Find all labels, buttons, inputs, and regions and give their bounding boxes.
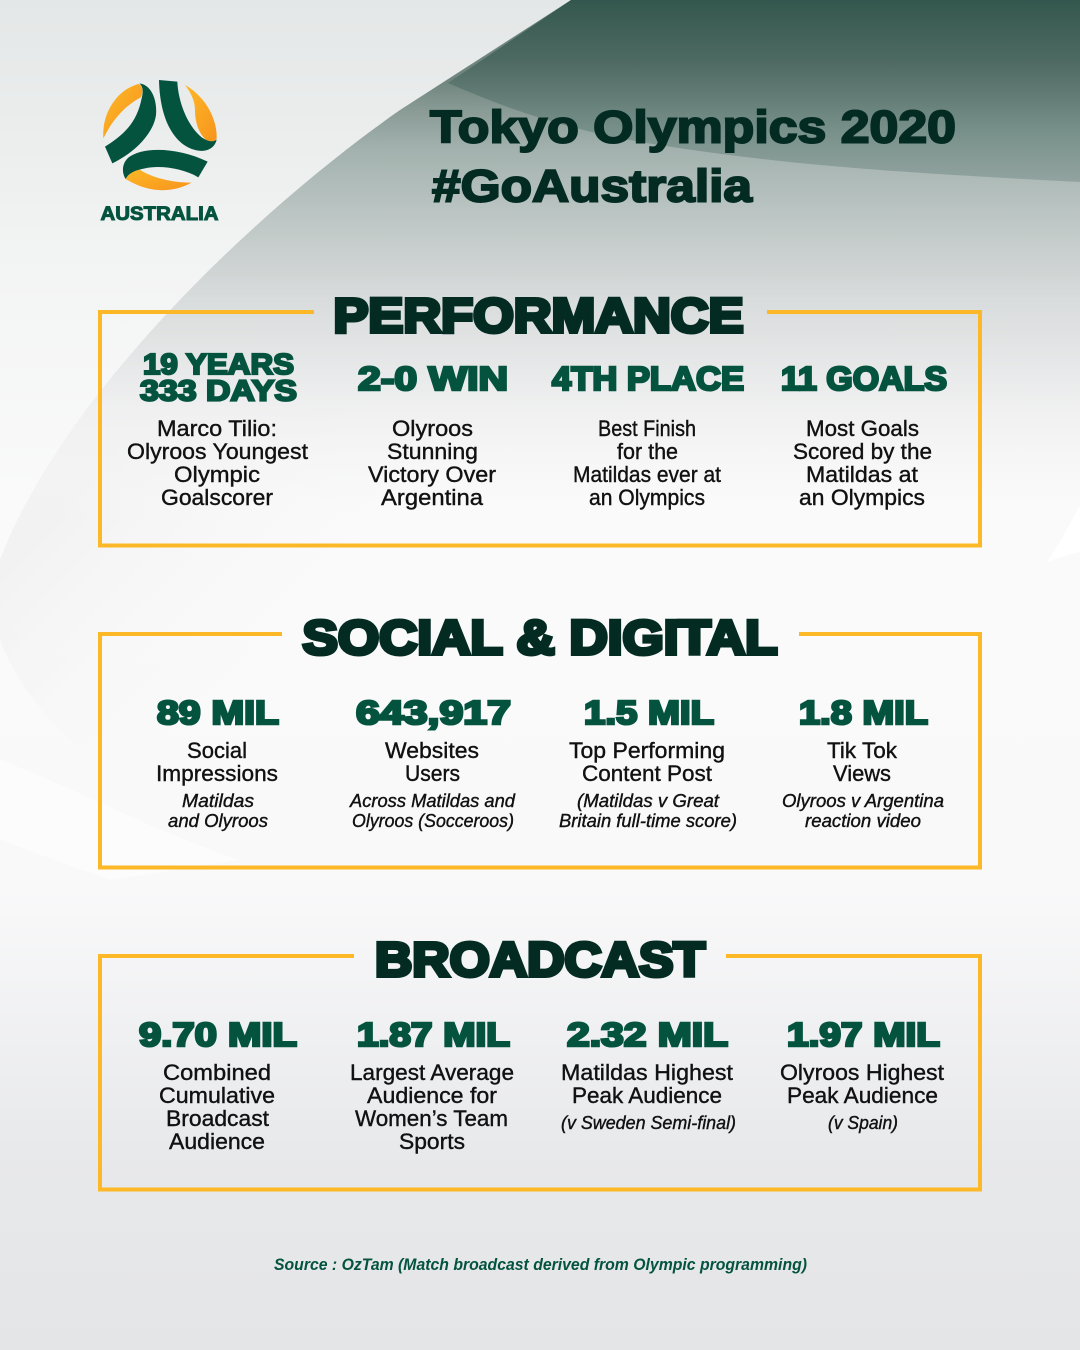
stat: 1.5 mil: 1.5 MIL xyxy=(584,695,714,732)
stat: 9.70 mil: Cumulative xyxy=(159,1083,275,1108)
panel frame: broadcast xyxy=(100,956,980,1190)
stat: 4th place: Best Finish xyxy=(598,416,696,441)
stat: 1.8 mil: 1.8 MIL xyxy=(799,695,928,732)
title: #GoAustralia xyxy=(432,161,753,212)
stat: 643,917: Websites xyxy=(385,738,479,763)
stat: 11 goals: an Olympics xyxy=(799,485,925,510)
stat: 1.5 mil: Top Performing xyxy=(569,738,725,763)
stat: 19 years 333 days: Goalscorer xyxy=(161,485,273,510)
stat: 2.32 mil: (v Sweden Semi-final) xyxy=(561,1113,736,1133)
stat: 1.87 mil: Sports xyxy=(399,1129,465,1154)
stat: 19 years 333 days: Marco Tilio: xyxy=(157,416,277,441)
stat: 19 years 333 days xyxy=(127,349,308,510)
stat: 19 years 333 days: Olyroos Youngest xyxy=(127,439,308,464)
icon: bottom green ribbon xyxy=(123,150,208,179)
stat: 2.32 mil: 2.32 MIL xyxy=(567,1017,728,1054)
stat: 89 mil: Matildas xyxy=(182,791,254,811)
stat: 1.5 mil: Content Post xyxy=(582,761,712,786)
stat: 1.97 mil: 1.97 MIL xyxy=(787,1017,940,1054)
panel: social and digital xyxy=(100,611,980,868)
stat: 2.32 mil: Matildas Highest xyxy=(561,1060,733,1085)
stat: 1.87 mil: Largest Average xyxy=(350,1060,514,1085)
stat: 1.97 mil xyxy=(780,1017,944,1133)
stat: 4th place: Matildas ever at xyxy=(573,462,721,487)
stat: 11 goals: Scored by the xyxy=(793,439,932,464)
stat: 19 years 333 days: 19 YEARS xyxy=(143,349,294,381)
heading: social and digital: SOCIAL & DIGITAL xyxy=(302,611,778,665)
stat: 2-0 win xyxy=(358,361,508,510)
stat: 9.70 mil: Broadcast xyxy=(166,1106,269,1131)
stat: 19 years 333 days: 333 DAYS xyxy=(140,376,297,408)
stat: 9.70 mil: 9.70 MIL xyxy=(139,1017,297,1054)
stat: 89 mil: Impressions xyxy=(156,761,278,786)
stat: 11 goals: 11 GOALS xyxy=(781,361,947,398)
stat: 89 mil: 89 MIL xyxy=(157,695,279,732)
icon: right orange ribbon xyxy=(185,85,217,142)
stat: 2.32 mil: Peak Audience xyxy=(572,1083,722,1108)
title xyxy=(430,102,956,212)
stat: 2-0 win: 2-0 WIN xyxy=(358,361,508,398)
stat: 89 mil xyxy=(156,695,279,831)
stat: 643,917: 643,917 xyxy=(356,695,511,732)
heading: performance: PERFORMANCE xyxy=(334,289,744,343)
panel frame: performance xyxy=(100,312,980,546)
stat: 4th place xyxy=(552,361,744,510)
stat: 1.8 mil xyxy=(782,695,944,831)
stat: 4th place: an Olympics xyxy=(589,485,705,510)
logo wordmark: AUSTRALIA xyxy=(100,203,218,225)
icon: left green ribbon xyxy=(105,83,156,163)
panel frame: social and digital xyxy=(100,634,980,868)
stat: 2-0 win: Victory Over xyxy=(368,462,496,487)
panel: broadcast xyxy=(100,933,980,1190)
stat: 1.87 mil: Women’s Team xyxy=(355,1106,508,1131)
stat: 89 mil: Social xyxy=(187,738,247,763)
stat: 4th place: 4TH PLACE xyxy=(552,361,744,398)
stat: 2-0 win: Argentina xyxy=(381,485,484,510)
stat: 1.87 mil xyxy=(350,1017,514,1154)
stat: 11 goals: Most Goals xyxy=(806,416,919,441)
stat: 1.5 mil: Britain full-time score) xyxy=(559,811,737,831)
stat: 1.87 mil: 1.87 MIL xyxy=(357,1017,510,1054)
stat: 643,917: Users xyxy=(405,761,460,786)
stat: 643,917: Across Matildas and xyxy=(349,791,516,811)
stat: 19 years 333 days: Olympic xyxy=(174,462,260,487)
stat: 1.8 mil: Olyroos v Argentina xyxy=(782,791,944,811)
stat: 9.70 mil: Audience xyxy=(169,1129,265,1154)
stat: 2-0 win: Stunning xyxy=(387,439,478,464)
stat: 1.97 mil: Peak Audience xyxy=(787,1083,938,1108)
panel: performance xyxy=(100,289,980,546)
stat: 4th place: for the xyxy=(617,439,678,464)
stat: 1.5 mil xyxy=(559,695,737,831)
stat: 2.32 mil xyxy=(561,1017,736,1133)
stat: 11 goals xyxy=(781,361,947,510)
stat: 11 goals: Matildas at xyxy=(806,462,918,487)
icon: bottom orange ribbon xyxy=(126,169,192,190)
stat: 1.5 mil: (Matildas v Great xyxy=(577,791,720,811)
stat: 1.97 mil: (v Spain) xyxy=(828,1113,898,1133)
stat: 1.8 mil: reaction video xyxy=(805,811,921,831)
icon: left orange ribbon xyxy=(103,84,142,138)
stat: 9.70 mil: Combined xyxy=(163,1060,271,1085)
stat: 643,917 xyxy=(349,695,516,831)
source note: Source : OzTam (Match broadcast derived from Olympic programming) xyxy=(274,1255,807,1274)
logo: Australia crest xyxy=(100,80,218,225)
stat: 1.8 mil: Views xyxy=(833,761,891,786)
stat: 9.70 mil xyxy=(139,1017,297,1154)
stat: 643,917: Olyroos (Socceroos) xyxy=(352,811,514,831)
icon: top green ribbon xyxy=(159,80,217,151)
stat: 89 mil: and Olyroos xyxy=(168,811,268,831)
stat: 2-0 win: Olyroos xyxy=(392,416,473,441)
stat: 1.97 mil: Olyroos Highest xyxy=(780,1060,944,1085)
stat: 1.87 mil: Audience for xyxy=(367,1083,497,1108)
stat: 1.8 mil: Tik Tok xyxy=(827,738,898,763)
title: Tokyo Olympics 2020 xyxy=(430,102,956,152)
heading: broadcast: BROADCAST xyxy=(375,933,705,987)
